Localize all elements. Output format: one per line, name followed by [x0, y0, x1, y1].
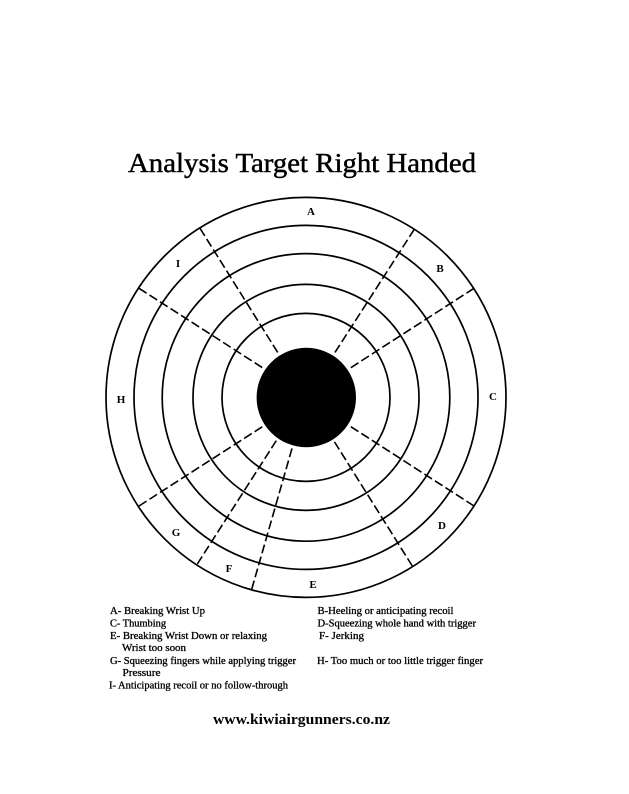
- legend: E- Breaking Wrist Down or relaxing: [110, 631, 267, 642]
- legend: C- Thumbing: [110, 618, 166, 630]
- title: Analysis Target Right Handed: [128, 148, 477, 178]
- legend: Wrist too soon: [122, 643, 186, 654]
- sector letters: [117, 206, 497, 591]
- dashed sector dividers: [139, 228, 474, 589]
- sector letters: B: [436, 263, 444, 275]
- legend: Pressure: [122, 668, 161, 679]
- sector letters: E: [309, 579, 317, 591]
- sector letters: D: [438, 520, 446, 532]
- concentric rings: [106, 197, 506, 597]
- target diagram: [106, 197, 506, 597]
- sector letters: G: [172, 527, 181, 539]
- bullseye: [257, 348, 356, 447]
- sector letters: H: [117, 394, 126, 406]
- legend: B-Heeling or anticipating recoil: [318, 606, 454, 617]
- website url: www.kiwiairgunners.co.nz: [213, 712, 390, 728]
- legend: F- Jerking: [319, 631, 364, 642]
- legend: D-Squeezing whole hand with trigger: [318, 618, 477, 630]
- sector letters: A: [307, 206, 315, 218]
- legend: H- Too much or too little trigger finger: [317, 656, 484, 667]
- sector letters: F: [226, 563, 233, 575]
- legend: A- Breaking Wrist Up: [110, 606, 205, 617]
- legend: I- Anticipating recoil or no follow-through: [109, 680, 288, 692]
- legend: [109, 606, 484, 692]
- legend: G- Squeezing fingers while applying trigger: [110, 656, 297, 667]
- sector letters: I: [176, 258, 180, 270]
- sector letters: C: [489, 391, 497, 403]
